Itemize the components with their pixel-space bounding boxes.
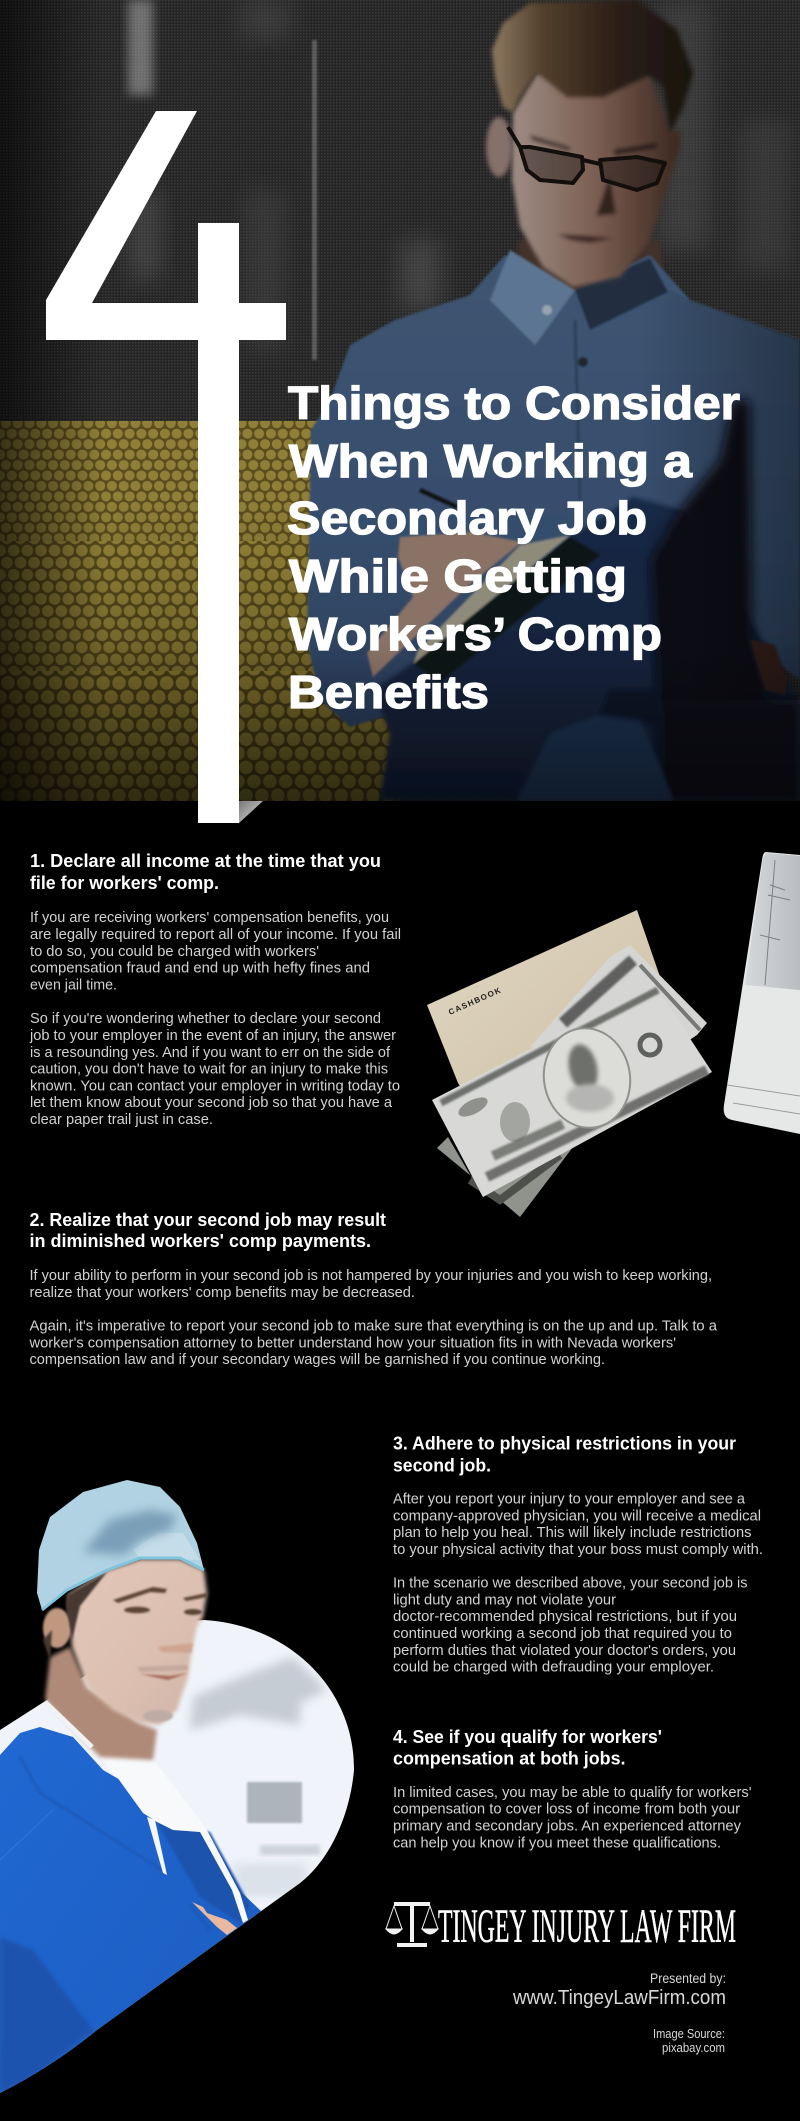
section 4 heading: 4. See if you qualify for workers' (393, 1727, 662, 1747)
section 2 heading: 2. Realize that your second job may result (30, 1210, 386, 1230)
yellow honeycomb bench (0, 421, 400, 801)
section 4 heading (393, 1727, 662, 1768)
presented by label: Presented by: (650, 1971, 726, 1986)
image source credit: pixabay.com (662, 2041, 725, 2055)
title: Secondary Job (287, 492, 647, 544)
section 1 body text: let them know about your second job so that you have a (30, 1095, 392, 1111)
section 1 body text: job to your employer in the event of an injury, the answer (29, 1028, 396, 1044)
section 4 body text (393, 1785, 752, 1852)
hair (43, 1572, 107, 1660)
logo: Tingey Injury Law Firm (386, 1900, 736, 1953)
section 1 body text: to do so, you could be charged with workers' (30, 944, 319, 960)
section 4 body text: In limited cases, you may be able to qualify for workers' (393, 1785, 752, 1801)
man's jeans (373, 400, 800, 801)
section 3 body text: continued working a second job that required you to (393, 1626, 732, 1642)
section 4 body text: can help you know if you meet these qualifications. (393, 1836, 721, 1852)
image: open ledger notebook (724, 852, 800, 1134)
title: Workers’ Comp (289, 608, 662, 660)
image: cashbook with dollar bills: CASHBOOK (447, 985, 503, 1017)
image: cashbook with dollar bills (427, 910, 712, 1217)
section 3 body text: company-approved physician, you will receive a medical (393, 1508, 761, 1524)
section 2 body text: Again, it's imperative to report your second job to make sure that everything is on the up and up. Talk to a (30, 1318, 717, 1334)
section 1 body text: compensation fraud and end up with hefty fines and (30, 960, 370, 976)
section 4 body text: compensation to cover loss of income from both your (393, 1802, 740, 1818)
man's face (512, 73, 680, 287)
section 1 body text: caution, you don't have to wait for an injury to make this (30, 1062, 388, 1078)
blurred hospital backdrop and scrubs (0, 1600, 360, 2100)
title: Benefits (288, 666, 489, 718)
section 3 body text: doctor-recommended physical restrictions, but if you (393, 1609, 737, 1625)
section 2 body text: realize that your workers' comp benefits may be decreased. (30, 1285, 415, 1301)
surgical cap (37, 1480, 204, 1610)
image source credit: Image Source: (653, 2027, 725, 2041)
hero photo: man writing in notebook (0, 0, 800, 801)
section 1 body text: If you are receiving workers' compensation benefits, you (30, 910, 389, 926)
title: When Working a (289, 435, 692, 487)
icon: scales of justice (386, 1904, 438, 1945)
title: Things to Consider (288, 377, 740, 429)
section 1 heading: 1. Declare all income at the time that you (30, 851, 381, 871)
section 1 body text: are legally required to report all of your income. If you fail (30, 927, 401, 943)
section 3 body text: plan to help you heal. This will likely include restrictions (393, 1525, 752, 1541)
section 3 heading (393, 1434, 736, 1476)
title (287, 377, 740, 718)
section 3 heading: second job. (393, 1456, 491, 1476)
title: While Getting (289, 550, 627, 602)
man's glasses (508, 127, 665, 190)
section 1 body text: even jail time. (30, 978, 117, 994)
section 3 body text: could be charged with defrauding your employer. (393, 1660, 714, 1676)
image source credit (653, 2027, 725, 2055)
section 1 body text: So if you're wondering whether to declare your second (30, 1011, 381, 1027)
section 2 heading: in diminished workers' comp payments. (30, 1231, 371, 1251)
face (68, 1559, 207, 1725)
man's neck and ear (483, 114, 664, 290)
section 2 body text: worker's compensation attorney to better understand how your situation fits in with Nevada workers' (28, 1336, 676, 1352)
section 3 body text (393, 1492, 763, 1676)
image: surgeon in blue scrubs (0, 1480, 360, 2100)
section 3 body text: perform duties that violated your doctor's orders, you (393, 1643, 736, 1659)
section 1 body text: known. You can contact your employer in writing today to (30, 1078, 400, 1094)
section 3 body text: light duty and may not violate your (393, 1592, 616, 1608)
big numeral 4 (46, 111, 286, 823)
section 1 body text (29, 910, 401, 1128)
facial features (113, 1587, 207, 1722)
section 3 body text: After you report your injury to your employer and see a (393, 1492, 745, 1508)
ear (43, 1608, 71, 1648)
neck (45, 1647, 157, 1760)
section 2 body text: compensation law and if your secondary wages will be garnished if you continue working. (30, 1352, 605, 1368)
section 1 heading: file for workers' comp. (30, 873, 219, 893)
section 3 heading: 3. Adhere to physical restrictions in your (393, 1434, 736, 1454)
section 4 body text: primary and secondary jobs. An experienced attorney (393, 1818, 742, 1834)
section 4 heading: compensation at both jobs. (393, 1748, 626, 1768)
section 3 body text: to your physical activity that your boss must comply with. (393, 1542, 763, 1558)
man's shirt (307, 250, 800, 727)
section 2 body text (28, 1268, 717, 1368)
white strap (45, 1702, 92, 1747)
section 2 body text: If your ability to perform in your second job is not hampered by your injuries and you wish to keep working, (30, 1268, 712, 1284)
section 3 body text: In the scenario we described above, your second job is (393, 1576, 748, 1592)
man's writing hand, notebook and pen (367, 490, 787, 695)
section 2 heading (30, 1210, 386, 1251)
section 1 heading (30, 851, 381, 893)
section 1 body text: clear paper trail just in case. (30, 1112, 213, 1128)
website url: www.TingeyLawFirm.com (512, 1987, 726, 2009)
section 1 body text: is a resounding yes. And if you want to err on the side of (30, 1045, 391, 1061)
man's hair (492, 0, 693, 133)
